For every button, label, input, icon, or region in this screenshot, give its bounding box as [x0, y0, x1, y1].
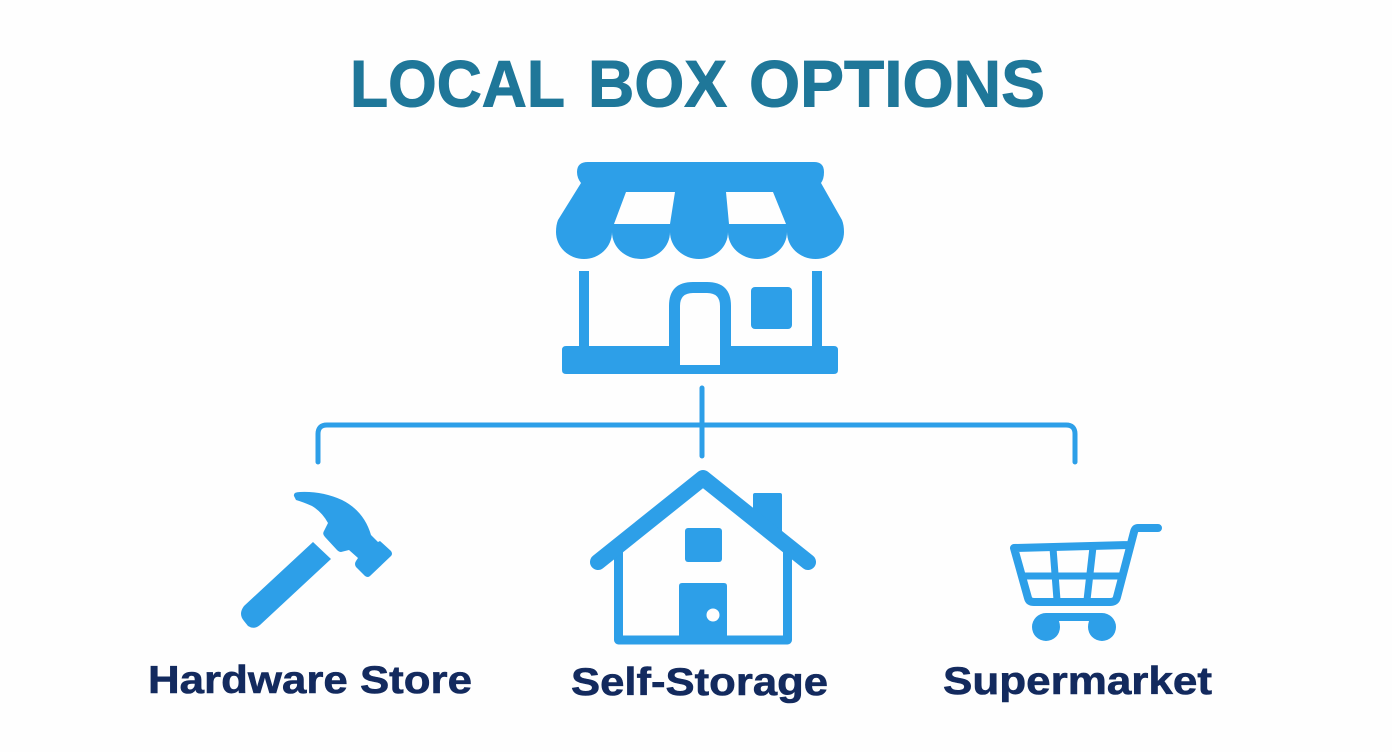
icon: house	[598, 478, 808, 640]
title: LOCAL	[350, 46, 565, 120]
icon: storefront	[556, 162, 844, 374]
icon: hammer	[241, 492, 392, 628]
title: OPTIONS	[749, 46, 1045, 120]
connector lines	[318, 388, 1075, 462]
label: Hardware Store: Hardware Store	[148, 659, 472, 702]
title: BOX	[588, 46, 727, 120]
icon: shopping cart	[1014, 528, 1158, 641]
label: Supermarket: Supermarket	[943, 660, 1212, 703]
label: Self-Storage: Self-Storage	[571, 661, 828, 704]
title	[350, 46, 1045, 120]
